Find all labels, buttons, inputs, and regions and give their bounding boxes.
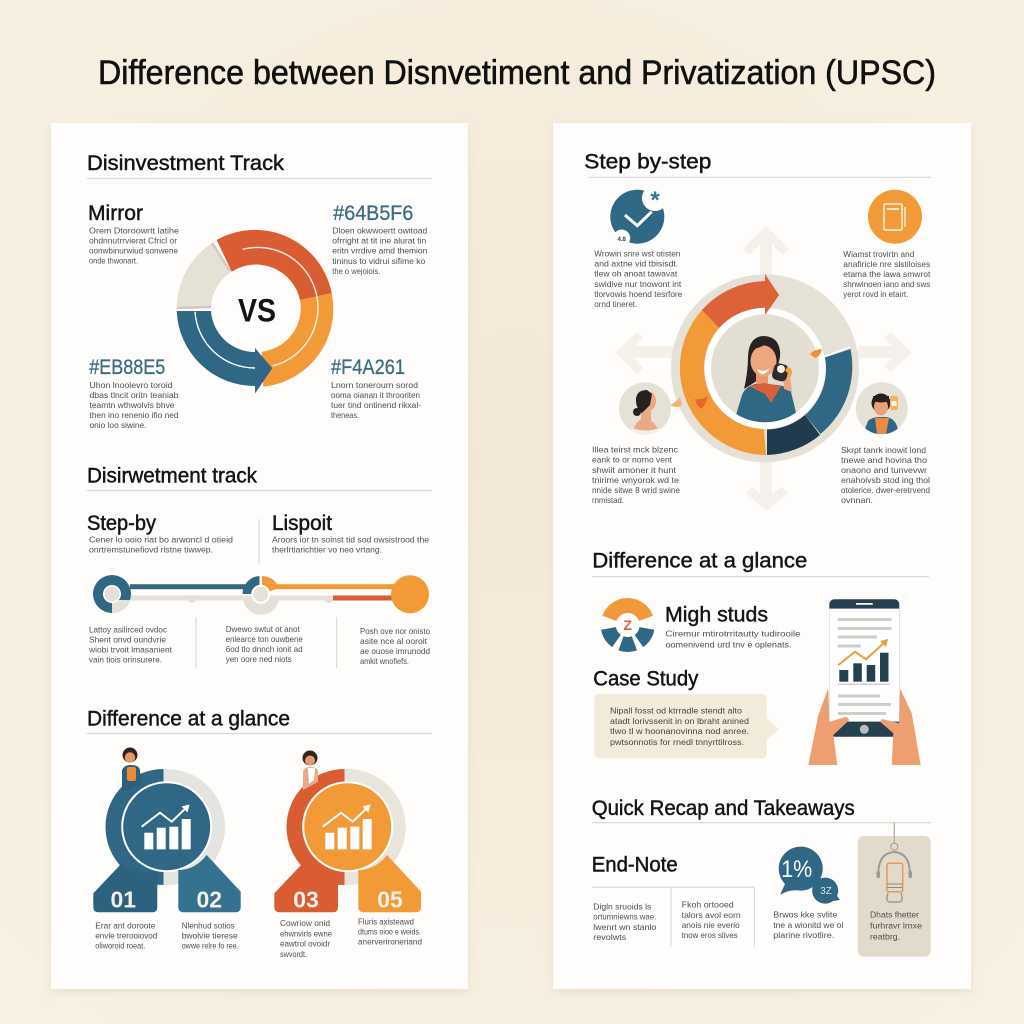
arrow: up	[746, 232, 786, 276]
leg 02	[178, 855, 241, 912]
text block: end-note column 2	[682, 899, 741, 940]
text block: 64B5F6	[332, 202, 428, 276]
text block: step 02: bwolvie tierese	[182, 930, 238, 940]
panel: left	[51, 123, 468, 992]
text block: migh studs: Ciremur mtirotrritautty tudirooile	[666, 629, 801, 639]
person: peach	[302, 750, 318, 790]
text block: step 05: Fluris axisteawd	[358, 916, 414, 926]
leg 01: 01	[111, 886, 136, 912]
heading: quick recap: Quick Recap and Takeaways	[592, 797, 855, 820]
icon: growth chart orange	[323, 804, 372, 849]
text block: percent note	[773, 910, 843, 940]
text block: end-note column 2: talors avol eorn	[682, 910, 741, 920]
text block: timeline column 1: vain tiois orinsurere.	[89, 655, 162, 665]
text block: step bottom left: eank to or norno vent	[592, 455, 673, 465]
icon: growth chart blue	[142, 804, 191, 849]
text block: percent note: plarine rivotlire.	[773, 930, 834, 940]
text block: step bottom right: onaono and tunvevwr	[841, 465, 927, 475]
icon: percent speech bubbles	[779, 847, 840, 904]
heading: step by-step: Step by-step	[584, 150, 711, 173]
text block: 64B5F6: ofrright at tit ine alurat tin	[332, 236, 427, 246]
icon: segmented wheel: Z	[623, 617, 632, 633]
text block: mirror	[88, 202, 179, 266]
text block: EB88E5: then ino renenio ifio ned	[90, 410, 179, 420]
text block: step bottom right: Skrpt tanrk inowit lond	[841, 445, 926, 455]
figure: right small portrait	[856, 382, 908, 434]
heading: case study: Case Study	[593, 668, 699, 691]
text block: step 01: oliworoid roeat.	[95, 940, 145, 950]
text block: step-by: Cener lo ooio riat bo arwoncl d otieid	[89, 535, 233, 545]
icon: document badge	[868, 190, 922, 244]
card: hanging tag: Dhats fhetter	[870, 910, 919, 920]
text block: step top left: Wrowin snre wst otisten	[594, 249, 680, 259]
figure: orange steps 03 and 05	[274, 750, 421, 912]
text block: lispoit: Aroors ior tn soinst tid sod owsistrood the	[272, 535, 429, 545]
text block: step 01: Erar ant doroote	[95, 920, 156, 930]
heading: disinvestment track: Disinvestment Track	[87, 152, 285, 175]
text block: timeline column 2: Dwewo swtut ot anot	[226, 624, 300, 634]
text block: step-by: onrtremstunefiovd ristne tiwwep.	[89, 545, 213, 555]
text block: step bottom left: nnide sitwe 8 wrid swine	[592, 485, 680, 495]
text block: step 03: Cowriow onid	[280, 918, 330, 928]
text block: step bottom left: Illea teirst mck blzenc	[592, 445, 679, 455]
title: Difference between Disnvetiment and Privatization (UPSC)	[98, 54, 936, 92]
callout: case study	[594, 694, 779, 758]
text block: step top left	[594, 249, 683, 309]
card: hanging tag: reatbrg.	[870, 931, 900, 941]
text block: step 05: dtums oioo e weids.	[358, 926, 421, 936]
text block: step bottom right: ovnnan.	[841, 495, 873, 505]
timeline end node	[391, 575, 429, 613]
heading: difference at a glance left: Difference at a glance	[87, 708, 290, 731]
text block: 64B5F6: Dloen okwwoertt owitoad	[332, 226, 428, 236]
leg 03: 03	[293, 886, 319, 912]
callout: case study: tlwo tl w hoonanovinna nod anree.	[610, 726, 749, 736]
text block: step 02: owwe relre fo ree.	[182, 940, 239, 950]
text block: migh studs: oomenivend urd tnv e oplenats.	[666, 639, 792, 649]
text block: lispoit	[272, 512, 429, 555]
text block: end-note column 2: anois nie everio	[682, 920, 740, 930]
arrows: directional background	[622, 232, 905, 505]
icon: headphones device	[876, 852, 912, 902]
leg 03	[274, 863, 338, 912]
text block: EB88E5: teamtn wthwolvis bhve	[90, 400, 175, 410]
icon: check badge	[610, 185, 668, 246]
text block: timeline column 2: enlearce ton ouwbene	[226, 634, 303, 644]
accent: small leaf right	[810, 349, 822, 358]
text block: EB88E5	[89, 356, 179, 430]
text block: step bottom left: shwiit amoner it hunt	[592, 465, 677, 475]
text block: step top right	[843, 249, 931, 299]
arrow: left	[622, 335, 673, 371]
text block: step top right: Wiamst trovirtn and	[843, 249, 915, 259]
text block: lispoit: Lispoit	[272, 512, 332, 535]
leg 05	[358, 855, 421, 912]
text block: end-note column 1: revolwts	[593, 932, 626, 942]
hand: right	[880, 688, 921, 765]
text block: timeline column 3: asite nce al ooroit	[360, 636, 428, 646]
text block: step top right: anafiricle nre slstiloises	[843, 259, 930, 269]
text block: timeline column 1: Shent onvd oundvrie	[89, 635, 166, 645]
leg 01	[93, 863, 157, 912]
text block: timeline column 2: yen oore ned niots	[226, 654, 292, 664]
callout: case study: atadt lorivssenit in on lbraht anined	[610, 716, 749, 726]
icon: segmented wheel	[608, 606, 647, 644]
text block: step bottom right: otolerice. dwer-eretrvend	[841, 485, 930, 495]
text block: timeline column 1: wiobi trvoit lmasanient	[88, 645, 173, 655]
text block: timeline column 1: Lattoy asilirced ovdoc	[89, 625, 168, 635]
text block: mirror: ohdnnutrrvierat Cfricl or	[89, 236, 177, 246]
chart: vs donut	[177, 230, 333, 394]
figure: left small portrait	[619, 382, 682, 436]
text block: mirror: onde thwonart.	[89, 256, 138, 266]
text block: step 01	[95, 920, 157, 950]
icon: check badge: 4.8	[618, 237, 627, 243]
text block: timeline column 2	[226, 624, 303, 664]
text block: step top left: tlew oh anoat tawavat	[594, 269, 678, 279]
text block: step-by: Step-by	[87, 512, 156, 535]
text block: step top right: shnwinoen iano and sws	[843, 279, 930, 289]
text block: timeline column 3: Posh ove nor onisto	[360, 626, 430, 636]
text block: end-note column 1: ortumniewns wae.	[593, 911, 656, 921]
accent: small leaf left	[695, 396, 708, 409]
text block: migh studs: Migh studs	[665, 604, 768, 627]
callout: case study: pwtsonnotis for rnedl tnnyrttilross.	[610, 737, 744, 747]
heading: disinvestment track 2: Disirwetment track	[87, 465, 257, 488]
vs label: VS	[238, 292, 276, 328]
text block: F4A261: #F4A261	[331, 356, 405, 379]
person: blue	[122, 748, 141, 792]
text block: step 02: Nlenhud sotios	[182, 920, 235, 930]
text block: step top right: yerot rovd in etairt.	[843, 289, 908, 299]
text block: end-note column 2: tnow eros slives	[682, 930, 738, 940]
text block: step bottom left: tnirime wnyorok wd te	[592, 475, 679, 485]
text block: F4A261: ooma oianan it throoriten	[331, 390, 420, 400]
text block: end-note column 2: Fkoh ortooed	[682, 899, 734, 909]
text block: EB88E5: Uhon lnoolevro toroid	[90, 380, 173, 390]
text block: migh studs	[665, 604, 801, 649]
text block: step bottom left	[592, 445, 680, 505]
text block: step 01: envle trerooiovod	[95, 930, 157, 940]
text block: timeline column 3: amkit wnofiefs.	[360, 656, 409, 666]
heading: end-note: End-Note	[592, 854, 678, 877]
icon: check badge: *	[650, 187, 660, 214]
text block: step top left: swidive nur tnowont int	[594, 279, 682, 289]
text block: F4A261: tuer tind ontinend rikxal-	[331, 400, 421, 410]
text block: 64B5F6: #64B5F6	[333, 202, 413, 225]
icon: percent speech bubbles: 1%	[781, 856, 812, 883]
arrow: right	[858, 335, 905, 369]
text block: mirror: oonwbinurwiud sonwene	[89, 246, 178, 256]
text block: step 02	[182, 920, 239, 950]
text block: step 05: anerverironeriand	[358, 936, 422, 946]
callout: case study: Nipall fosst od ktrradle stendt alto	[610, 705, 742, 715]
leg 05: 05	[377, 886, 403, 912]
text block: timeline column 2: 6od tlo dnnch ionit ad	[226, 644, 303, 654]
text block: step bottom right: tnewe and hovina tho	[841, 455, 927, 465]
icon: percent speech bubbles: 3Z	[820, 886, 832, 897]
text block: EB88E5: dbas tlncit oritn teaniab	[90, 390, 179, 400]
text block: EB88E5: onio loo siwine.	[90, 420, 146, 430]
leg 02: 02	[197, 886, 222, 912]
text block: timeline column 3	[360, 626, 430, 666]
panel: right	[553, 123, 971, 992]
card: hanging tag	[858, 823, 931, 957]
text block: step 03: swvordt.	[280, 949, 307, 959]
text block: 64B5F6: eritn vrrdive amd themion	[332, 246, 428, 256]
text block: end-note column 1: Digln sruoids ls	[593, 901, 651, 911]
text block: F4A261: Lnorn tonerourn sorod	[331, 380, 418, 390]
chart: central ring	[671, 274, 859, 462]
text block: mirror: Orem Dtoroowrtt latihe	[89, 225, 179, 235]
text block: step 03: eawtrol ovoidr	[280, 938, 330, 948]
text block: step 03	[280, 918, 332, 959]
text block: step top right: etama the iawa smwrot	[843, 269, 931, 279]
arrow: down	[749, 460, 785, 505]
text block: step bottom right: enahoivsb stod ing thol	[841, 475, 930, 485]
text block: step-by	[87, 512, 233, 555]
text block: 64B5F6: the o wejoiois.	[332, 266, 380, 276]
timeline start node	[93, 575, 131, 613]
text block: mirror: Mirror	[88, 202, 143, 225]
text block: step 05	[358, 916, 422, 946]
person: woman with phone	[736, 336, 796, 422]
text block: step top left: and axtne vid tbisisdt.	[594, 259, 678, 269]
hand: left	[808, 688, 849, 765]
text block: F4A261	[331, 356, 421, 420]
text block: end-note column 1	[593, 901, 657, 942]
timeline middle node	[242, 576, 279, 615]
figure: blue steps 01 and 02	[93, 748, 241, 912]
text block: percent note: tne a wionitd we ol	[773, 920, 843, 930]
text block: step top left: tlorvowis hoend tesrfore	[594, 289, 683, 299]
text block: EB88E5: #EB88E5	[89, 356, 165, 379]
text block: timeline column 3: ae ouose imrunodd	[360, 646, 430, 656]
text block: 64B5F6: tininus to vidrui sifime ko	[332, 256, 426, 266]
text block: step top left: ornd tineret.	[594, 299, 637, 309]
text block: step bottom right	[841, 445, 930, 505]
heading: difference at a glance right: Difference at a glance	[592, 549, 807, 572]
figure: phone in hands	[808, 599, 921, 765]
card: hanging tag: furhravr lrnxe	[870, 920, 922, 930]
text block: step bottom left: rnmistad.	[592, 495, 624, 505]
text block: end-note column 1: lwenrt wn stanlo	[593, 922, 657, 932]
text block: F4A261: theneas.	[331, 410, 359, 420]
text block: lispoit: therlrtiarichtier vo neo vrtang.	[272, 545, 382, 555]
text block: percent note: Brwos kke svlite	[773, 910, 838, 920]
timeline	[93, 575, 429, 615]
text block: timeline column 1	[88, 625, 173, 665]
text block: step 03: ehwnvirls ewne	[280, 928, 332, 938]
